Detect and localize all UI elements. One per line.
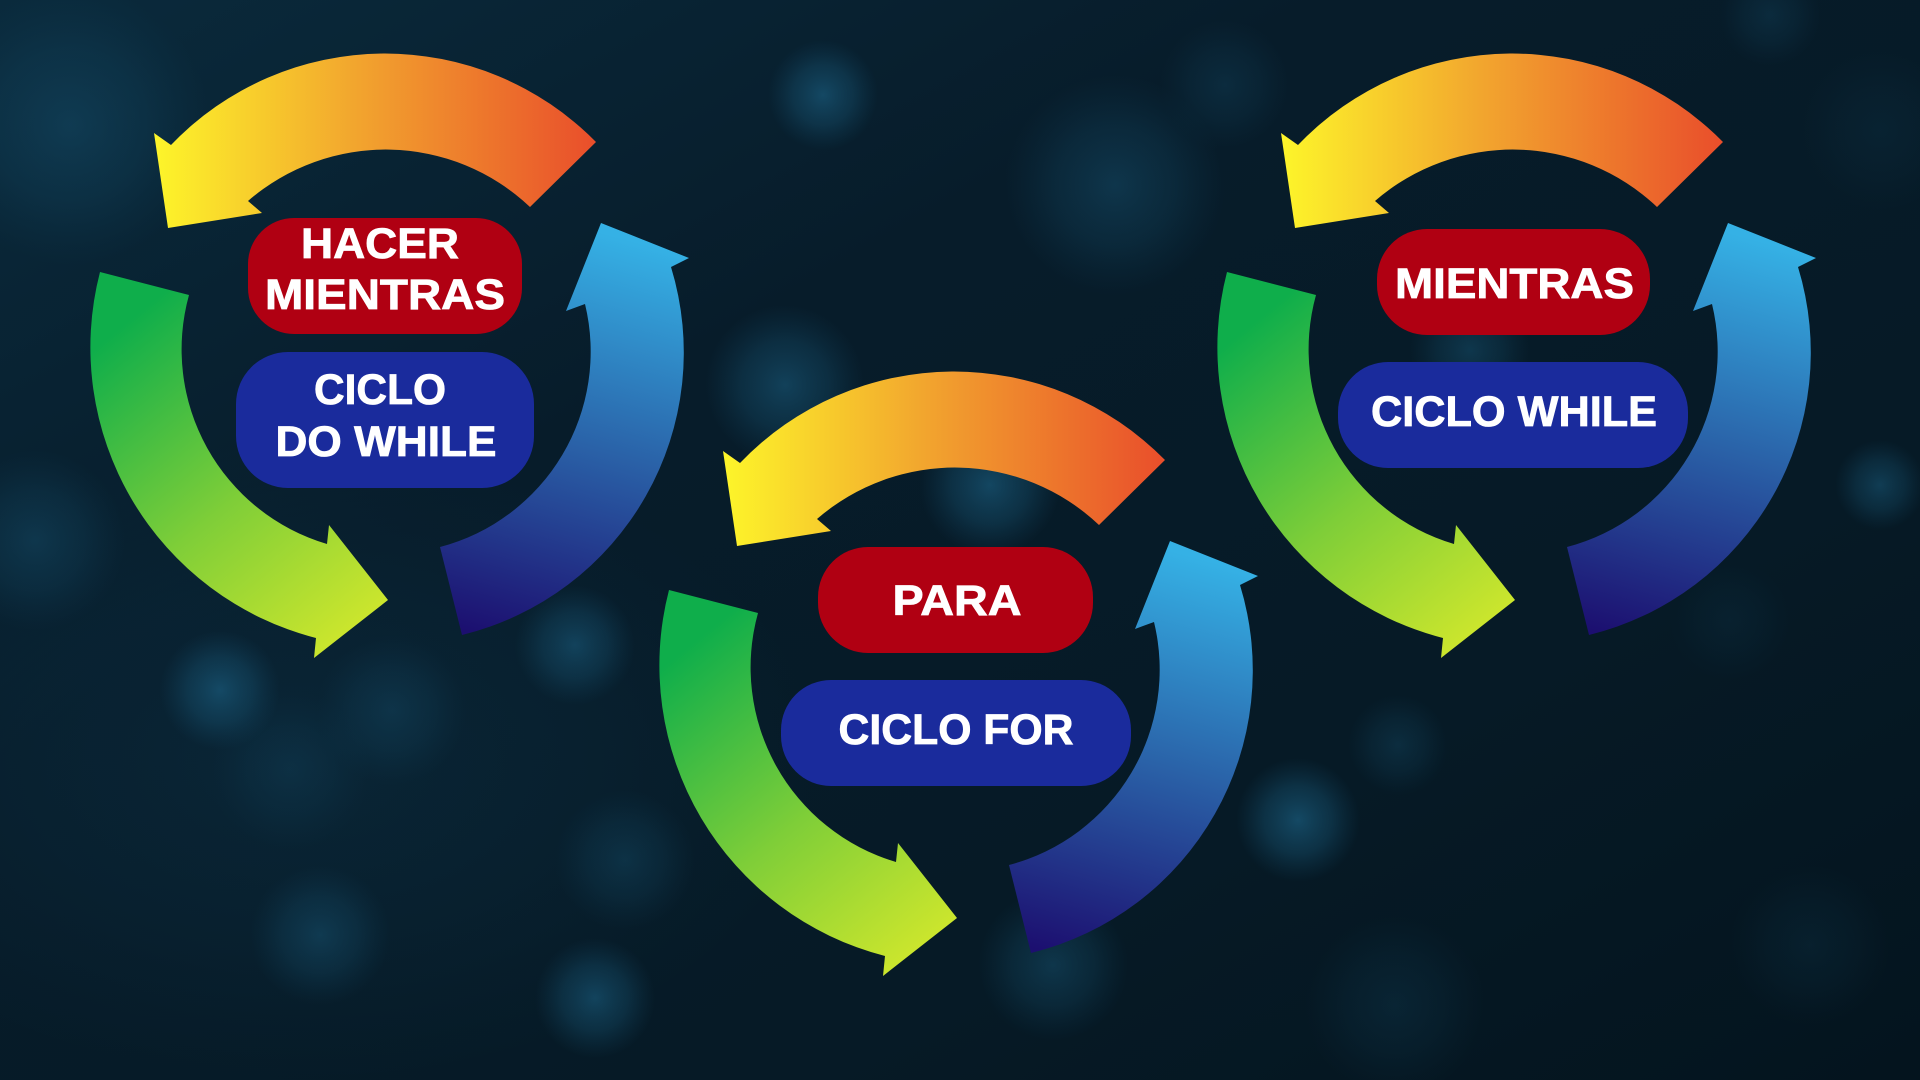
arrow: green: [90, 272, 388, 658]
arrow: blue: [440, 223, 689, 635]
arrow: blue: [1567, 223, 1816, 635]
label: mientras: [1377, 229, 1650, 335]
label: ciclo for: [781, 680, 1131, 786]
label: ciclo do while: DO WHILE: [276, 418, 496, 466]
arrow: blue: [1009, 541, 1258, 953]
arrow: orange: [1281, 54, 1723, 228]
label: para: [818, 547, 1093, 653]
label: hacer mientras: MIENTRAS: [265, 271, 505, 319]
label: para: PARA: [892, 577, 1022, 625]
label: mientras: MIENTRAS: [1395, 260, 1634, 308]
arrows: while: [1217, 54, 1816, 658]
label: ciclo do while: CICLO: [314, 366, 446, 414]
label: ciclo do while: [236, 352, 534, 488]
arrow: green: [1217, 272, 1515, 658]
cycle: do while: [90, 54, 689, 658]
arrow: orange: [154, 54, 596, 228]
label: hacer mientras: [248, 218, 522, 334]
arrow: green: [659, 590, 957, 976]
label: ciclo while: CICLO WHILE: [1371, 388, 1657, 436]
label: ciclo for: CICLO FOR: [838, 706, 1074, 754]
cycle: for: [659, 372, 1258, 976]
cycle: while: [1217, 54, 1816, 658]
arrow: orange: [723, 372, 1165, 546]
label: ciclo while: [1338, 362, 1688, 468]
arrows: for: [659, 372, 1258, 976]
label: hacer mientras: HACER: [301, 220, 459, 268]
